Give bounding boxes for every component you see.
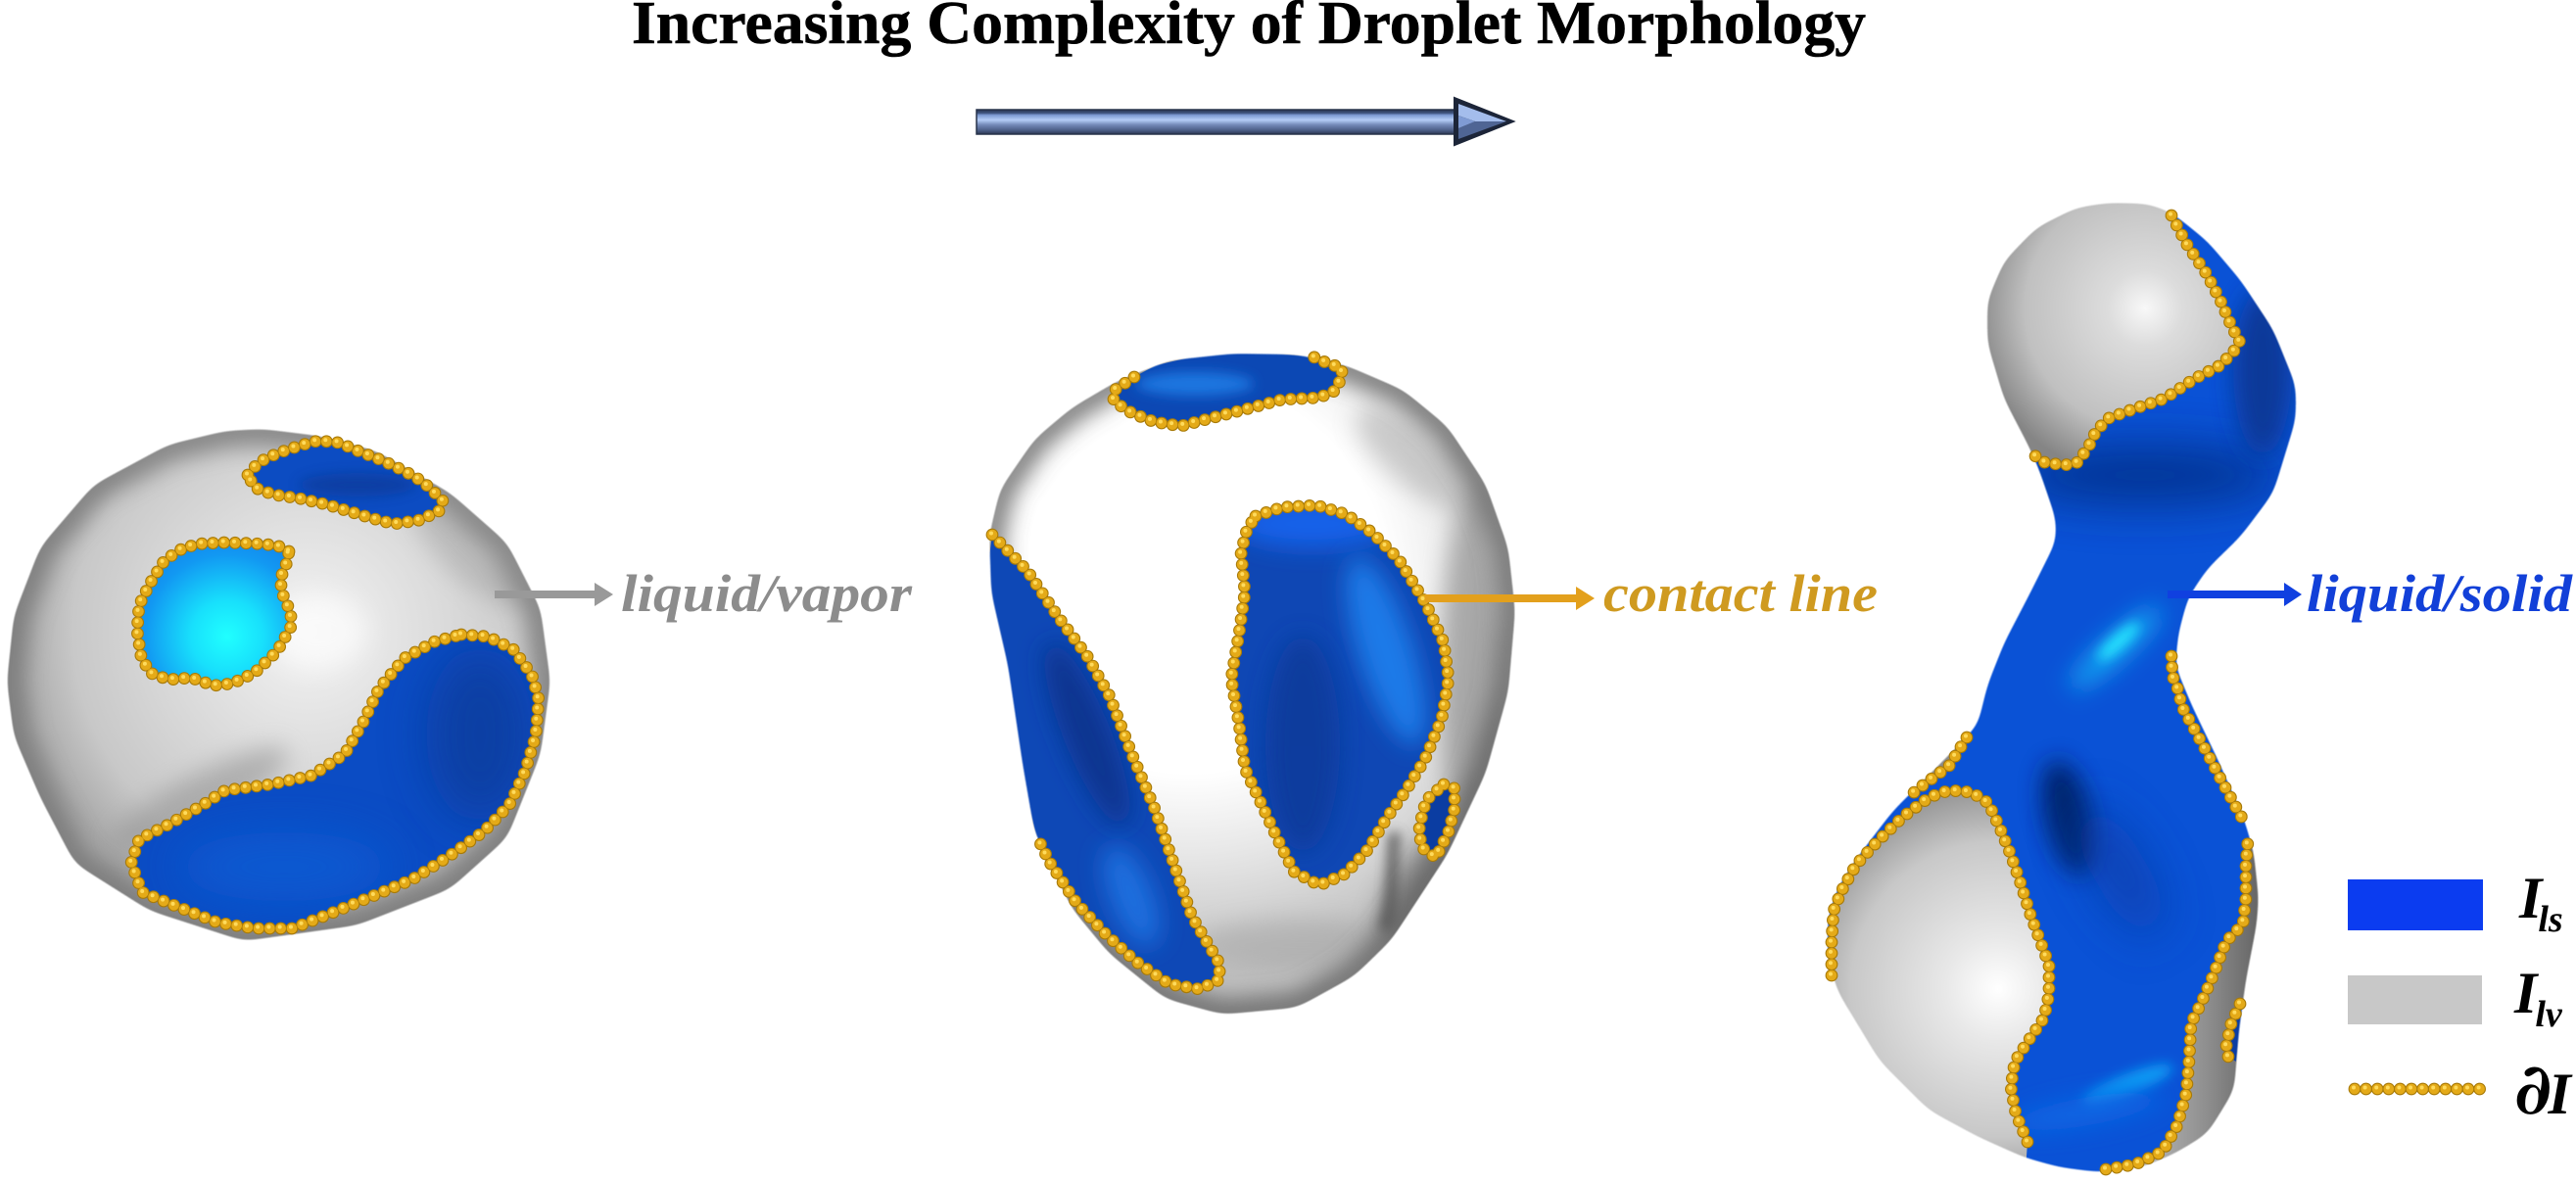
- droplet 3 liquid/solid surface: [1812, 186, 2312, 1183]
- droplet 3 lower-left liquid/vapor patch: [1834, 794, 2047, 1159]
- legend label: partial I: ∂I: [2514, 1047, 2573, 1130]
- droplet 3 contact line beads: [1831, 213, 2248, 1169]
- legend label: I lv: I: [2514, 961, 2537, 1025]
- droplet 1 bright cyan patch: [137, 543, 291, 686]
- droplet 3 lower-right liquid/vapor patch: [2123, 848, 2259, 1170]
- legend swatch: contact line beads: [2354, 1087, 2480, 1089]
- droplet 3 head liquid/vapor patch: [1986, 202, 2234, 461]
- droplet 2 top solid patch: [1119, 353, 1338, 422]
- label: contact line: contact line: [1603, 564, 1878, 623]
- arrow: liquid/solid: [2168, 583, 2302, 606]
- legend swatch: liquid/solid: [2348, 879, 2483, 930]
- droplet 1 large solid patch: [131, 635, 539, 928]
- droplet 2 contact line beads: [991, 355, 1455, 989]
- legend label: I ls: ls: [2538, 899, 2563, 940]
- droplet 2 left solid patch: [984, 535, 1220, 989]
- arrow: contact line: [1425, 587, 1595, 610]
- droplet 1: spherical: [7, 429, 550, 940]
- droplet 2 small solid patch: [1422, 789, 1452, 850]
- droplet 2 liquid/vapor surface: [989, 353, 1515, 1015]
- droplet 3: dumbbell-shaped: [1812, 186, 2312, 1183]
- droplet 2: egg-shaped: [985, 351, 1515, 1015]
- droplet 3 grey sliver: [1924, 748, 1955, 780]
- label: liquid/vapor: liquid/vapor: [621, 564, 913, 623]
- arrow: increasing complexity: [977, 98, 1513, 145]
- droplet 2 central solid patch: [1231, 500, 1449, 885]
- droplet 1 top solid patch: [254, 445, 439, 519]
- label: liquid/solid: liquid/solid: [2307, 564, 2573, 623]
- arrow: liquid/vapor: [495, 583, 613, 606]
- legend: [2348, 866, 2573, 1130]
- legend swatch: liquid/vapor: [2348, 975, 2482, 1024]
- droplet 1 contact line beads: [130, 439, 539, 928]
- legend label: I lv: lv: [2535, 994, 2563, 1035]
- droplet 3 small side patch: [2230, 1010, 2243, 1062]
- legend label: I ls: I: [2519, 866, 2542, 930]
- droplet 1 liquid/vapor surface: [7, 429, 550, 940]
